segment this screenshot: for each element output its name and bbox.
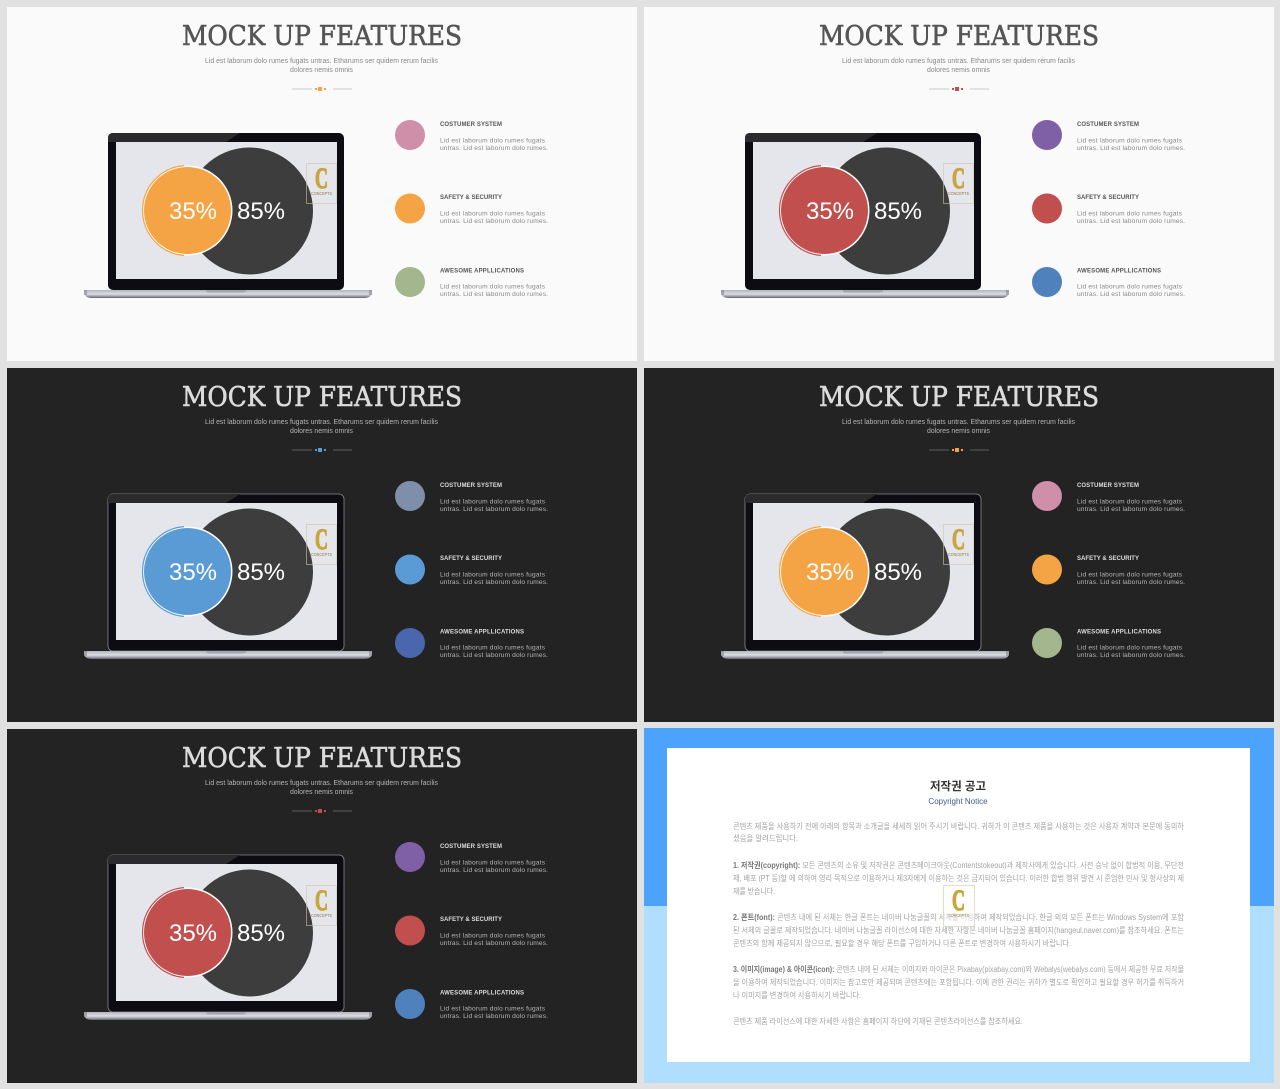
feature list: Lid est laborum dolo rumes fugats [440,138,546,144]
laptop mockup with venn chart: CONCEPTS [311,552,332,557]
divider ornament [929,448,989,452]
copyright body text: 2. 폰트(font): 콘텐츠 내에 된 서체는 한글 폰트는 네이버 나눔글꼴의 서체를 이용하여 제작되었습니다. 한글 외의 모든 폰트는 Windows System에 포함 [733,912,1185,922]
subtitle: Lid est laborum dolo rumes fugats untras. Etharums ser quidem rerum facilis [205,780,438,787]
subtitle: dolores nemis omnis [927,67,990,74]
feature list: untras. Lid est laborum dolo rumes. [440,579,548,586]
feature list: untras. Lid est laborum dolo rumes. [1077,506,1185,513]
panel: light slide red [644,7,1274,361]
laptop mockup with venn chart [84,855,372,1020]
laptop mockup with venn chart: 35% [169,920,217,947]
copyright body text: 을 이용하여 제작되었습니다. 이미지는 참고로만 제공되며 콘텐츠에는 포함됩니다. 이에 관한 권리는 귀하가 별도로 확인하고 필요할 경우 허가를 취득하거 [733,977,1184,987]
subtitle [842,419,1075,435]
laptop mockup with venn chart: 85% [874,559,922,586]
laptop mockup with venn chart: C [315,884,328,917]
feature list: Lid est laborum dolo rumes fugats [440,932,546,940]
feature list: Lid est laborum dolo rumes fugats [440,210,546,218]
feature list: untras. Lid est laborum dolo rumes. [440,291,548,298]
subtitle: dolores nemis omnis [290,789,353,796]
laptop mockup with venn chart: 85% [874,198,922,225]
feature list: Lid est laborum dolo rumes fugats [1077,644,1183,652]
copyright body text: 된 서체의 글꼴로 제작되었습니다. 네이버 나눔글꼴 라이선스에 대한 자세한 사항은 네이버 나눔글꼴 홈페이지(hangeul.naver.com)를 참조하세요. 폰트는 [733,925,1184,935]
feature list: Lid est laborum dolo rumes fugats [1077,284,1183,290]
feature list [395,481,548,659]
laptop mockup with venn chart: 85% [237,920,285,947]
feature list: COSTUMER SYSTEM [440,483,502,489]
feature list: untras. Lid est laborum dolo rumes. [1077,579,1185,586]
subtitle [205,58,438,74]
title: MOCK UP FEATURES [182,20,462,52]
feature list: untras. Lid est laborum dolo rumes. [440,652,548,659]
copyright body text: 재, 배포 (PT 등)할 에 의하여 영리 목적으로 이용하거나 제3자에게 이용하는 것은 금지되어 있습니다. 이러한 합법 행위 발견 시 준엄한 민사 및 형사상의 제 [733,873,1184,883]
panel: light slide orange [7,7,637,361]
laptop mockup with venn chart: CONCEPTS [311,913,332,918]
copyright body text [733,821,1185,1026]
copyright heading: 저작권 공고 [930,779,986,793]
laptop mockup with venn chart: 85% [237,559,285,586]
laptop mockup with venn chart: 85% [237,198,285,225]
laptop mockup with venn chart: 35% [169,559,217,586]
feature list: untras. Lid est laborum dolo rumes. [1077,652,1185,659]
feature list: SAFETY & SECURITY [440,556,502,562]
feature list [395,842,548,1020]
feature list: AWESOME APPLLICATIONS [440,630,524,636]
feature list: COSTUMER SYSTEM [1077,122,1139,128]
laptop mockup with venn chart: C [952,162,965,195]
panel: dark slide orange [644,368,1274,722]
title: MOCK UP FEATURES [182,742,462,774]
feature list: Lid est laborum dolo rumes fugats [440,1006,546,1012]
copyright subheading: Copyright Notice [928,797,988,806]
panel: dark slide red [7,729,637,1083]
subtitle: Lid est laborum dolo rumes fugats untras. Etharums ser quidem rerum facilis [205,419,438,426]
subtitle: dolores nemis omnis [290,67,353,74]
feature list: Lid est laborum dolo rumes fugats [440,860,546,866]
laptop mockup with venn chart: CONCEPTS [948,552,969,557]
title: MOCK UP FEATURES [182,381,462,413]
laptop mockup with venn chart: CONCEPTS [948,191,969,196]
laptop mockup with venn chart: 35% [169,198,217,225]
copyright body text: 1. 저작권(copyright): 모든 콘텐츠의 소유 및 저작권은 콘텐츠메이크아웃(Contentstokeout)과 제작사에게 있습니다. 사전 승낙 없이 합법적 이용, 무단전 [733,860,1184,870]
copyright body text: 셨음을 알려드립니다. [733,833,798,843]
copyright body text: 3. 이미지(image) & 아이콘(icon): 콘텐츠 내에 된 서체는 이미지와 아이콘은 Pixabay(pixabay.com)와 Webalys(webalys.com) 등에서 제공한 무료 저작물 [733,964,1184,974]
laptop mockup with venn chart: C [952,523,965,556]
feature list: untras. Lid est laborum dolo rumes. [440,867,548,874]
laptop mockup with venn chart [84,133,372,298]
feature list: Lid est laborum dolo rumes fugats [1077,498,1183,506]
feature list: Lid est laborum dolo rumes fugats [1077,210,1183,218]
feature list: untras. Lid est laborum dolo rumes. [440,218,548,225]
copyright body text: 나 이미지를 변경하여 사용하시기 바랍니다. [733,990,861,1000]
subtitle [842,58,1075,74]
feature list: AWESOME APPLLICATIONS [1077,268,1161,274]
subtitle: Lid est laborum dolo rumes fugats untras. Etharums ser quidem rerum facilis [842,419,1075,426]
feature list: Lid est laborum dolo rumes fugats [440,284,546,290]
feature list: untras. Lid est laborum dolo rumes. [440,1013,548,1020]
subtitle: dolores nemis omnis [927,428,990,435]
title: MOCK UP FEATURES [819,381,1099,413]
feature list [1032,481,1185,659]
divider ornament [292,448,352,452]
subtitle: Lid est laborum dolo rumes fugats untras. Etharums ser quidem rerum facilis [842,58,1075,65]
feature list: AWESOME APPLLICATIONS [1077,630,1161,636]
laptop mockup with venn chart [721,494,1009,659]
feature list: Lid est laborum dolo rumes fugats [1077,138,1183,144]
feature list: COSTUMER SYSTEM [1077,483,1139,489]
subtitle [205,780,438,796]
copyright body text: 콘텐츠의 함께 제공되지 않으므로, 필요할 경우 해당 폰트를 구입하거나 다른 폰트로 변경하여 사용하시기 바랍니다. [733,938,1071,948]
laptop mockup with venn chart: CONCEPTS [311,191,332,196]
copyright body text: 콘텐츠 제품을 사용하기 전에 아래의 항목과 소개글을 세세히 읽어 주시기 바랍니다. 귀하가 이 콘텐츠 제품을 사용하는 것은 사용자 계약과 본문에 동의하 [733,821,1185,831]
laptop mockup with venn chart [721,133,1009,298]
subtitle [205,419,438,435]
feature list: Lid est laborum dolo rumes fugats [440,498,546,506]
feature list: COSTUMER SYSTEM [440,122,502,128]
copyright body text: 콘텐츠 제품 라이선스에 대한 자세한 사항은 홈페이지 하단에 기재된 콘텐츠라이선스를 참조하세요. [733,1016,1023,1026]
feature list: untras. Lid est laborum dolo rumes. [1077,145,1185,152]
panel: dark slide blue [7,368,637,722]
divider ornament [929,87,989,91]
feature list: Lid est laborum dolo rumes fugats [440,572,546,578]
subtitle: dolores nemis omnis [290,428,353,435]
feature list: untras. Lid est laborum dolo rumes. [1077,291,1185,298]
divider ornament [292,809,352,813]
logo watermark: C [952,884,965,917]
subtitle: Lid est laborum dolo rumes fugats untras. Etharums ser quidem rerum facilis [205,58,438,65]
feature list: untras. Lid est laborum dolo rumes. [440,940,548,947]
feature list [395,120,548,298]
feature list: untras. Lid est laborum dolo rumes. [440,145,548,152]
feature list: Lid est laborum dolo rumes fugats [440,644,546,652]
feature list: SAFETY & SECURITY [1077,195,1139,201]
feature list: COSTUMER SYSTEM [440,844,502,850]
feature list: AWESOME APPLLICATIONS [440,990,524,996]
feature list: SAFETY & SECURITY [1077,556,1139,562]
panel: copyright notice [644,728,1274,1083]
laptop mockup with venn chart [84,494,372,659]
feature list: untras. Lid est laborum dolo rumes. [1077,218,1185,225]
feature list: SAFETY & SECURITY [440,195,502,201]
feature list: SAFETY & SECURITY [440,917,502,923]
feature list: Lid est laborum dolo rumes fugats [1077,572,1183,578]
divider ornament [292,87,352,91]
logo watermark: CONCEPTS [948,913,969,918]
logo watermark [944,884,974,926]
feature list: untras. Lid est laborum dolo rumes. [440,506,548,513]
laptop mockup with venn chart: 35% [806,198,854,225]
feature list: AWESOME APPLLICATIONS [440,268,524,274]
title: MOCK UP FEATURES [819,20,1099,52]
laptop mockup with venn chart: 35% [806,559,854,586]
copyright body text: 재를 받습니다. [733,886,775,896]
feature list [1032,120,1185,298]
laptop mockup with venn chart: C [315,523,328,556]
laptop mockup with venn chart: C [315,162,328,195]
